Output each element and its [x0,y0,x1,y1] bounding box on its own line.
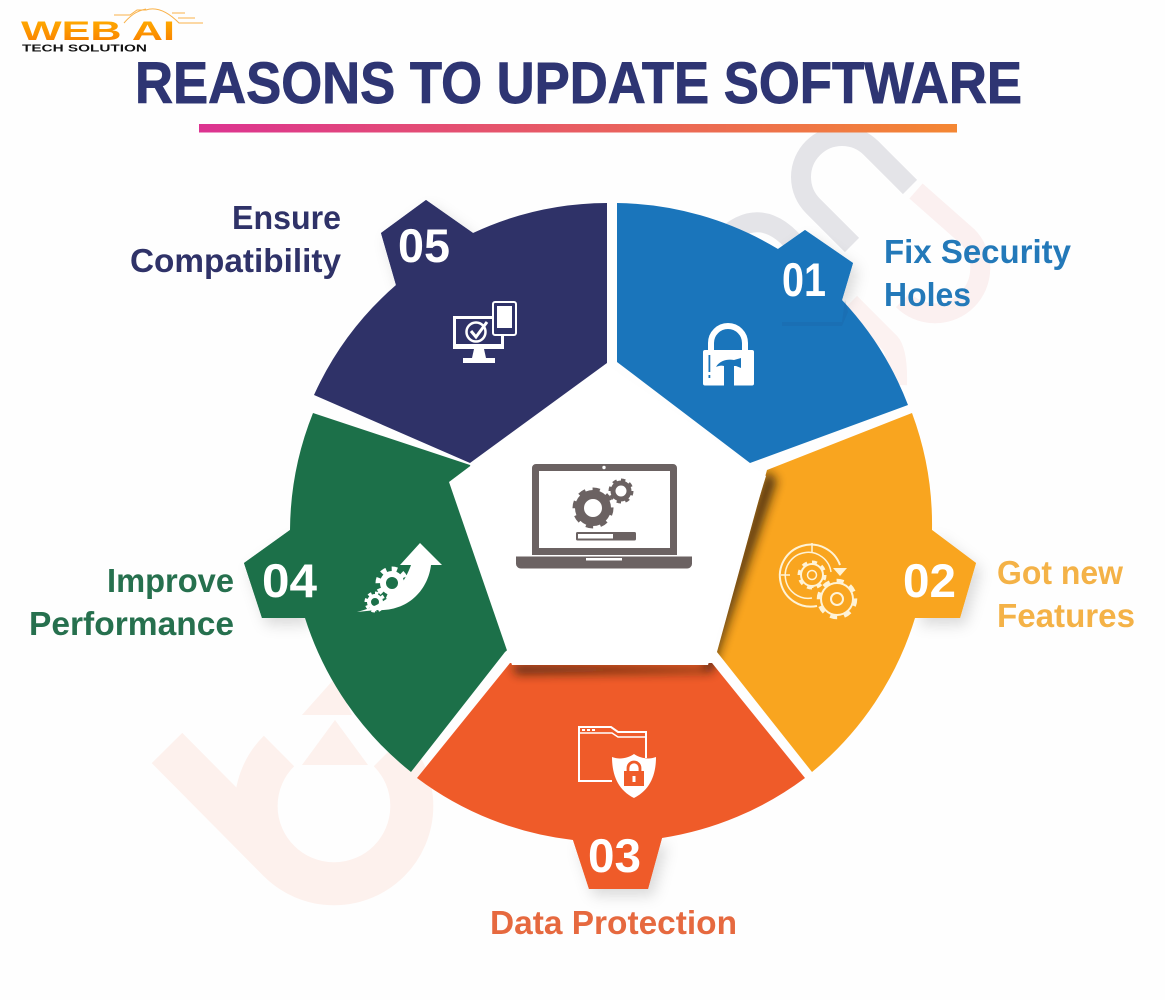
label: improve performance: Performance [29,605,234,642]
segment 04: improve performance [244,413,525,772]
tab shadow 02 [915,530,976,618]
label: fix security holes: Fix Security [884,233,1072,270]
label: improve performance [29,562,234,642]
segment shape 02 [717,413,976,772]
number 01: 01 [782,253,826,306]
icon: devices with check [453,302,516,363]
title underline [199,124,957,132]
label: ensure compatibility: Compatibility [130,242,342,279]
tab shadow 01 [778,230,853,300]
large gear [576,490,610,526]
tab shadow 03 [573,838,662,889]
number 02: 02 [903,554,956,607]
label: fix security holes: Holes [884,276,971,313]
logo tagline: TECH SOLUTION [22,44,147,54]
label: got new features: Got new [997,554,1123,591]
icon: cycle with gears [780,543,856,618]
segment shape 01 [617,203,908,463]
segment 03: data protection [417,663,805,889]
number 05: 05 [398,219,450,272]
label: fix security holes [884,233,1072,313]
segment shape 04 [244,413,525,772]
label: ensure compatibility [130,199,342,279]
tab shadow 05 [381,200,473,285]
icon: padlock with hammer [703,326,754,386]
icon: gears with rising arrow [357,543,442,612]
number 04: 04 [262,554,317,607]
title: REASONS TO UPDATE SOFTWARE [135,51,1022,116]
tab shadow 04 [244,530,305,618]
watermark: top right [722,136,980,385]
icon: laptop with gears [516,464,692,569]
label: improve performance: Improve [107,562,234,599]
segment 02: got new features [717,413,976,772]
segment shape 03 [417,663,805,889]
small gear [610,480,632,502]
center pentagon [449,364,777,674]
watermark: bottom left [167,678,412,884]
segment shape 05 [314,200,607,463]
segment 01: fix security holes [617,203,908,463]
segment 05: ensure compatibility [314,200,607,463]
label: ensure compatibility: Ensure [232,199,341,236]
icon: folder with shield [579,727,656,798]
number 03: 03 [588,829,641,882]
label: got new features: Features [997,597,1135,634]
progress bar [576,532,636,540]
logo circuit lines [114,9,203,23]
logo wordmark: WEB AI [21,16,175,46]
pentagon shape [449,364,766,665]
label: data protection: Data Protection [490,904,737,941]
pentagon shadow [512,470,777,674]
laptop body [516,464,692,569]
label: got new features [997,554,1135,634]
tab inner shade 01 [782,300,848,326]
logo [21,9,203,54]
